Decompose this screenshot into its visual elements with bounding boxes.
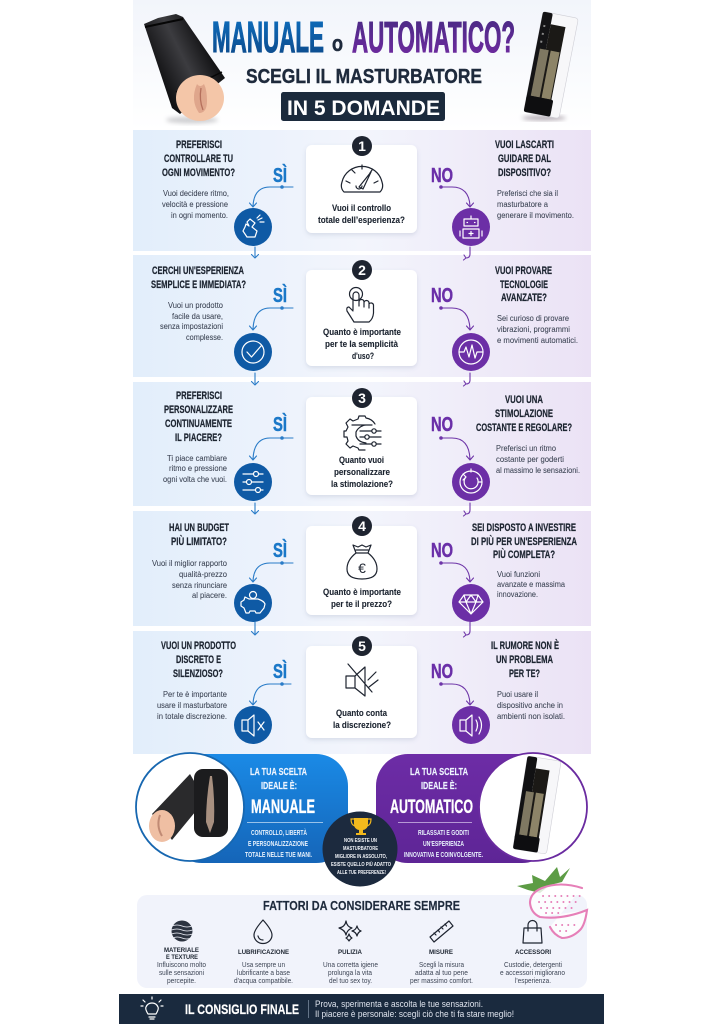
factor text: e accessori migliorano — [500, 968, 565, 977]
SÌ label: SÌ — [273, 284, 287, 307]
factor: size — [410, 921, 473, 985]
title: AUTOMATICO?: AUTOMATICO? — [352, 13, 515, 62]
left heading: DISCRETO E — [176, 654, 221, 666]
left heading — [164, 390, 233, 444]
right description: dispositivo anche in — [497, 700, 563, 710]
arrow: down no — [464, 622, 470, 637]
icon: finger tap — [234, 208, 272, 246]
left description: usare il masturbatore — [157, 700, 227, 710]
left description: in totale discrezione. — [157, 711, 227, 721]
panel: question 4 — [133, 511, 591, 637]
right description — [496, 443, 580, 475]
right heading: STIMOLAZIONE — [495, 408, 553, 420]
arrow: no — [439, 306, 474, 330]
left description — [163, 453, 227, 484]
number badge 2 — [352, 260, 372, 280]
left description: in ogni momento. — [171, 210, 228, 220]
card question text — [333, 708, 391, 731]
question card — [306, 270, 417, 366]
question card — [306, 145, 417, 233]
SÌ label: SÌ — [273, 660, 287, 683]
left heading: PREFERISCI — [176, 139, 222, 151]
right heading: DISPOSITIVO? — [498, 167, 551, 179]
left description — [162, 188, 229, 220]
arrow: no — [439, 561, 474, 582]
factor text: per massimo comfort. — [410, 976, 473, 985]
factor text: d'acqua compatibile. — [234, 976, 293, 985]
arrow: yes — [250, 185, 293, 207]
right heading: TECNOLOGIE — [500, 279, 548, 291]
arrow: down yes — [252, 247, 258, 258]
NO label: NO — [431, 285, 453, 307]
left heading — [162, 139, 235, 179]
factor text: Influiscono molto — [157, 960, 206, 969]
left heading: OGNI MOVIMENTO? — [162, 167, 235, 179]
right description: innovazione. — [497, 589, 538, 599]
right heading: UN PROBLEMA — [496, 654, 553, 666]
card question text: Quanto conta — [336, 708, 388, 719]
card question text: d'uso? — [352, 351, 374, 362]
factor text: MISURE — [429, 949, 454, 956]
card question text: la discrezione? — [333, 720, 391, 731]
icon: ruler — [430, 921, 453, 942]
arrow: yes — [250, 306, 293, 330]
number badge 5: 5 — [358, 638, 366, 654]
icon: gear with sliders — [344, 416, 381, 450]
left heading — [151, 265, 246, 291]
question card — [306, 397, 417, 495]
result description: CONTROLLO, LIBERTÀ — [251, 828, 307, 837]
subtitle: SCEGLI IL MASTURBATORE — [246, 66, 482, 88]
factor text: Custodie, detergenti — [504, 960, 562, 969]
right description: Preferisci che sia il — [497, 188, 558, 198]
result heading — [410, 766, 468, 792]
left heading — [161, 640, 236, 680]
right description — [497, 569, 565, 599]
banner text — [315, 999, 514, 1020]
icon: piggy bank — [234, 584, 272, 622]
factor text: Usa sempre un — [242, 960, 285, 969]
card question text: per te la semplicità — [325, 339, 399, 350]
left heading: CONTROLLARE TU — [164, 153, 233, 165]
result description: TOTALE NELLE TUE MANI. — [245, 850, 312, 859]
number badge 4 — [352, 516, 372, 536]
badge: in 5 domande: IN 5 DOMANDE — [287, 96, 440, 120]
title: o: o — [332, 31, 343, 56]
left description: Ti piace cambiare — [167, 453, 227, 463]
NO label: NO — [431, 661, 453, 683]
arrow: down yes — [252, 622, 258, 635]
icon: shopping bag — [523, 920, 542, 943]
icon: robot — [452, 208, 490, 246]
icon: speaker on — [452, 706, 490, 744]
number badge 1 — [352, 136, 372, 156]
left heading — [169, 522, 229, 548]
left description: facile da usare, — [172, 311, 223, 321]
number badge 3: 3 — [358, 390, 366, 406]
result description — [245, 828, 312, 859]
number badge 3 — [352, 388, 372, 408]
factor: lubrication — [234, 920, 293, 985]
card question text: Quanto è importante — [323, 327, 401, 338]
right description: Sei curioso di provare — [497, 313, 569, 323]
arrow: no — [439, 185, 474, 207]
right description: e movimenti automatici. — [497, 335, 578, 345]
banner heading: IL CONSIGLIO FINALE — [185, 1001, 299, 1017]
left description — [160, 300, 223, 342]
panel: question 3 — [133, 382, 591, 516]
factor text: sulle sensazioni — [159, 968, 204, 977]
icon: gauge — [341, 165, 383, 192]
icon: check circle — [234, 333, 272, 371]
factor text: PULIZIA — [338, 949, 362, 956]
right description: avanzate e massima — [497, 579, 565, 589]
icon: pointing hand — [347, 288, 374, 322]
right heading: AVANZATE? — [501, 292, 547, 304]
callout text — [331, 838, 391, 876]
card question text: per te il prezzo? — [331, 599, 392, 610]
factor: accessories — [500, 949, 565, 985]
factor text — [157, 947, 206, 985]
arrow: no — [439, 436, 474, 460]
left heading: PIÙ LIMITATO? — [171, 535, 227, 548]
question card — [306, 526, 417, 615]
left description: qualità-prezzo — [179, 569, 227, 579]
factor text: Scegli la misura — [419, 960, 464, 969]
callout text: NON ESISTE UN — [344, 838, 377, 844]
arrow: down yes — [252, 373, 258, 385]
right description: Vuoi funzioni — [497, 569, 540, 579]
result description: RILASSATI E GODITI — [418, 828, 469, 837]
right description — [497, 313, 578, 345]
left heading: VUOI UN PRODOTTO — [161, 640, 236, 652]
header: title block — [212, 13, 515, 121]
card question text: Vuoi il controllo — [332, 203, 391, 214]
callout text: ESISTE QUELLO PIÙ ADATTO — [331, 861, 391, 868]
question card — [306, 646, 417, 738]
left description: Per te è importante — [163, 689, 227, 699]
number badge 4: 4 — [358, 518, 366, 534]
icon: light bulb — [141, 997, 163, 1019]
decoration: strawberry logo — [517, 867, 587, 938]
right description: Preferisci un ritmo — [496, 443, 556, 453]
factor text: prolunga la vita — [328, 968, 372, 977]
factor text: ACCESSORI — [515, 949, 551, 956]
right heading: IL RUMORE NON È — [491, 639, 559, 652]
panel: question 5 — [133, 631, 591, 754]
SÌ label: SÌ — [273, 164, 287, 187]
left description: velocità e pressione — [162, 199, 228, 209]
panel: factors — [137, 895, 587, 988]
right description: generare il movimento. — [497, 210, 574, 220]
card question text: Quanto vuoi — [339, 455, 384, 466]
panel: question 1 — [133, 130, 591, 260]
icon: trophy — [351, 818, 371, 835]
right heading: DI PIÙ PER UN'ESPERIENZA — [471, 535, 577, 548]
icon: muted speaker — [234, 706, 272, 744]
left heading: PREFERISCI — [176, 390, 222, 402]
factor: material — [157, 920, 206, 985]
panel: question 2 — [133, 255, 591, 386]
result description — [404, 828, 483, 859]
arrow: down no — [464, 247, 470, 260]
left heading: SILENZIOSO? — [173, 668, 223, 680]
right description: ambienti non isolati. — [497, 711, 565, 721]
SÌ label: SÌ — [273, 413, 287, 436]
callout: no absolute best — [322, 812, 398, 886]
callout text: MASTURBATORE — [343, 846, 378, 852]
factor text — [410, 949, 473, 985]
result heading: IDEALE È: — [261, 779, 297, 792]
NO label: NO — [431, 165, 453, 187]
number badge 2: 2 — [358, 262, 366, 278]
number badge 5 — [352, 636, 372, 656]
factor text — [323, 949, 378, 985]
left description: al piacere. — [192, 590, 227, 600]
NO label: NO — [431, 540, 453, 562]
card question text — [323, 327, 401, 362]
card question text — [323, 587, 401, 610]
result heading: LA TUA SCELTA — [250, 766, 307, 778]
right description: vibrazioni, programmi — [497, 324, 570, 334]
left description: ogni volta che vuoi. — [163, 474, 227, 484]
right heading — [495, 265, 552, 304]
product image: open manual toy — [149, 769, 228, 842]
icon: textured sphere — [172, 920, 192, 942]
icon: speaker muted — [346, 664, 378, 696]
card question text — [331, 455, 393, 490]
left heading: CONTINUAMENTE — [165, 418, 232, 430]
icon: sliders — [234, 463, 272, 501]
card question text: personalizzare — [334, 467, 390, 478]
factors heading: FATTORI DA CONSIDERARE SEMPRE — [263, 898, 460, 913]
result card: automatico — [376, 753, 587, 863]
card question text: Quanto è importante — [323, 587, 401, 598]
factor text: LUBRIFICAZIONE — [238, 949, 290, 956]
product image: automatic toy — [513, 756, 561, 854]
right heading: GUIDARE DAL — [498, 153, 551, 165]
left description: senza impostazioni — [160, 321, 223, 331]
factor text: lubrificante a base — [237, 968, 290, 977]
right heading: VUOI LASCARTI — [495, 139, 554, 151]
factor text: MATERIALE — [164, 947, 200, 954]
left description: complesse. — [186, 332, 223, 342]
card question text: la stimolazione? — [331, 479, 393, 490]
banner: final advice — [119, 994, 604, 1024]
banner text: Il piacere è personale: scegli ciò che ti fa stare meglio! — [315, 1009, 514, 1020]
right heading: VUOI PROVARE — [495, 265, 552, 277]
arrow: yes — [250, 436, 293, 460]
icon: sparkles — [339, 921, 361, 941]
factor text — [500, 949, 565, 985]
right heading: SEI DISPOSTO A INVESTIRE — [472, 522, 576, 534]
left heading: PERSONALIZZARE — [164, 404, 233, 416]
factor text: del tuo sex toy. — [329, 976, 372, 985]
title: MANUALE: MANUALE — [212, 13, 324, 62]
product image: automatic masturbator — [522, 12, 578, 121]
factor text: adatta al tuo pene — [415, 968, 468, 977]
result heading — [250, 766, 307, 792]
product image: manual masturbator — [144, 14, 225, 124]
card question text: totale dell’esperienza? — [318, 215, 405, 226]
arrow: down yes — [252, 503, 258, 514]
result title: MANUALE — [251, 797, 315, 818]
result description: UN'ESPERIENZA — [423, 839, 464, 848]
result title: AUTOMATICO — [390, 797, 473, 818]
right heading — [476, 394, 572, 434]
icon: money bag: € — [358, 560, 366, 576]
arrow: down no — [464, 373, 470, 386]
right heading: PER TE? — [509, 668, 540, 680]
SÌ label: SÌ — [273, 539, 287, 562]
arrow: yes — [250, 682, 291, 705]
right heading: PIÙ COMPLETA? — [493, 548, 555, 561]
right description: Puoi usare il — [497, 689, 538, 699]
left heading: IL PIACERE? — [175, 432, 222, 444]
left heading: SEMPLICE E IMMEDIATA? — [151, 279, 246, 291]
result description: INNOVATIVA E COINVOLGENTE. — [404, 850, 483, 859]
factor text: l'esperienza. — [515, 976, 551, 985]
result card: manuale — [136, 753, 348, 863]
arrow: yes — [250, 561, 293, 582]
right description — [497, 689, 565, 721]
arrow: no — [439, 682, 474, 705]
left description: Vuoi decidere ritmo, — [163, 188, 229, 198]
right description: masturbatore a — [497, 199, 548, 209]
arrow: down no — [464, 503, 470, 516]
left heading: HAI UN BUDGET — [169, 522, 229, 534]
factor text: Una corretta igiene — [323, 960, 378, 969]
banner text: Prova, sperimenta e ascolta le tue sensazioni. — [315, 999, 483, 1010]
icon: cycle target — [452, 463, 490, 501]
factor text — [234, 949, 293, 985]
left description — [157, 689, 227, 721]
NO label: NO — [431, 414, 453, 436]
right heading — [471, 522, 577, 561]
right heading — [491, 639, 559, 680]
number badge 1: 1 — [358, 138, 366, 154]
right heading: COSTANTE E REGOLARE? — [476, 422, 572, 434]
callout text: MIGLIORE IN ASSOLUTO, — [335, 854, 387, 860]
result description: E PERSONALIZZAZIONE — [248, 839, 308, 848]
card question text — [318, 203, 405, 226]
right description: al massimo le sensazioni. — [496, 465, 580, 475]
right heading: VUOI UNA — [505, 394, 543, 406]
right description — [497, 188, 574, 220]
left description: ritmo e pressione — [169, 463, 227, 473]
left description: Vuoi il miglior rapporto — [152, 558, 227, 568]
icon: diamond — [452, 584, 490, 622]
callout text: ALLE TUE PREFERENZE! — [337, 870, 386, 876]
factor text: percepite. — [167, 976, 196, 985]
factor: cleaning — [323, 921, 378, 985]
right heading — [495, 139, 554, 179]
icon: pulse — [452, 333, 490, 371]
left heading: CERCHI UN'ESPERIENZA — [152, 265, 244, 277]
right description: costante per goderti — [496, 454, 564, 464]
result heading: IDEALE È: — [421, 779, 457, 792]
factor text: E TEXTURE — [166, 954, 199, 961]
left description: senza rinunciare — [172, 580, 227, 590]
left description: Vuoi un prodotto — [168, 300, 223, 310]
icon: drop — [254, 920, 272, 944]
result heading: LA TUA SCELTA — [410, 766, 468, 778]
left description — [152, 558, 227, 600]
